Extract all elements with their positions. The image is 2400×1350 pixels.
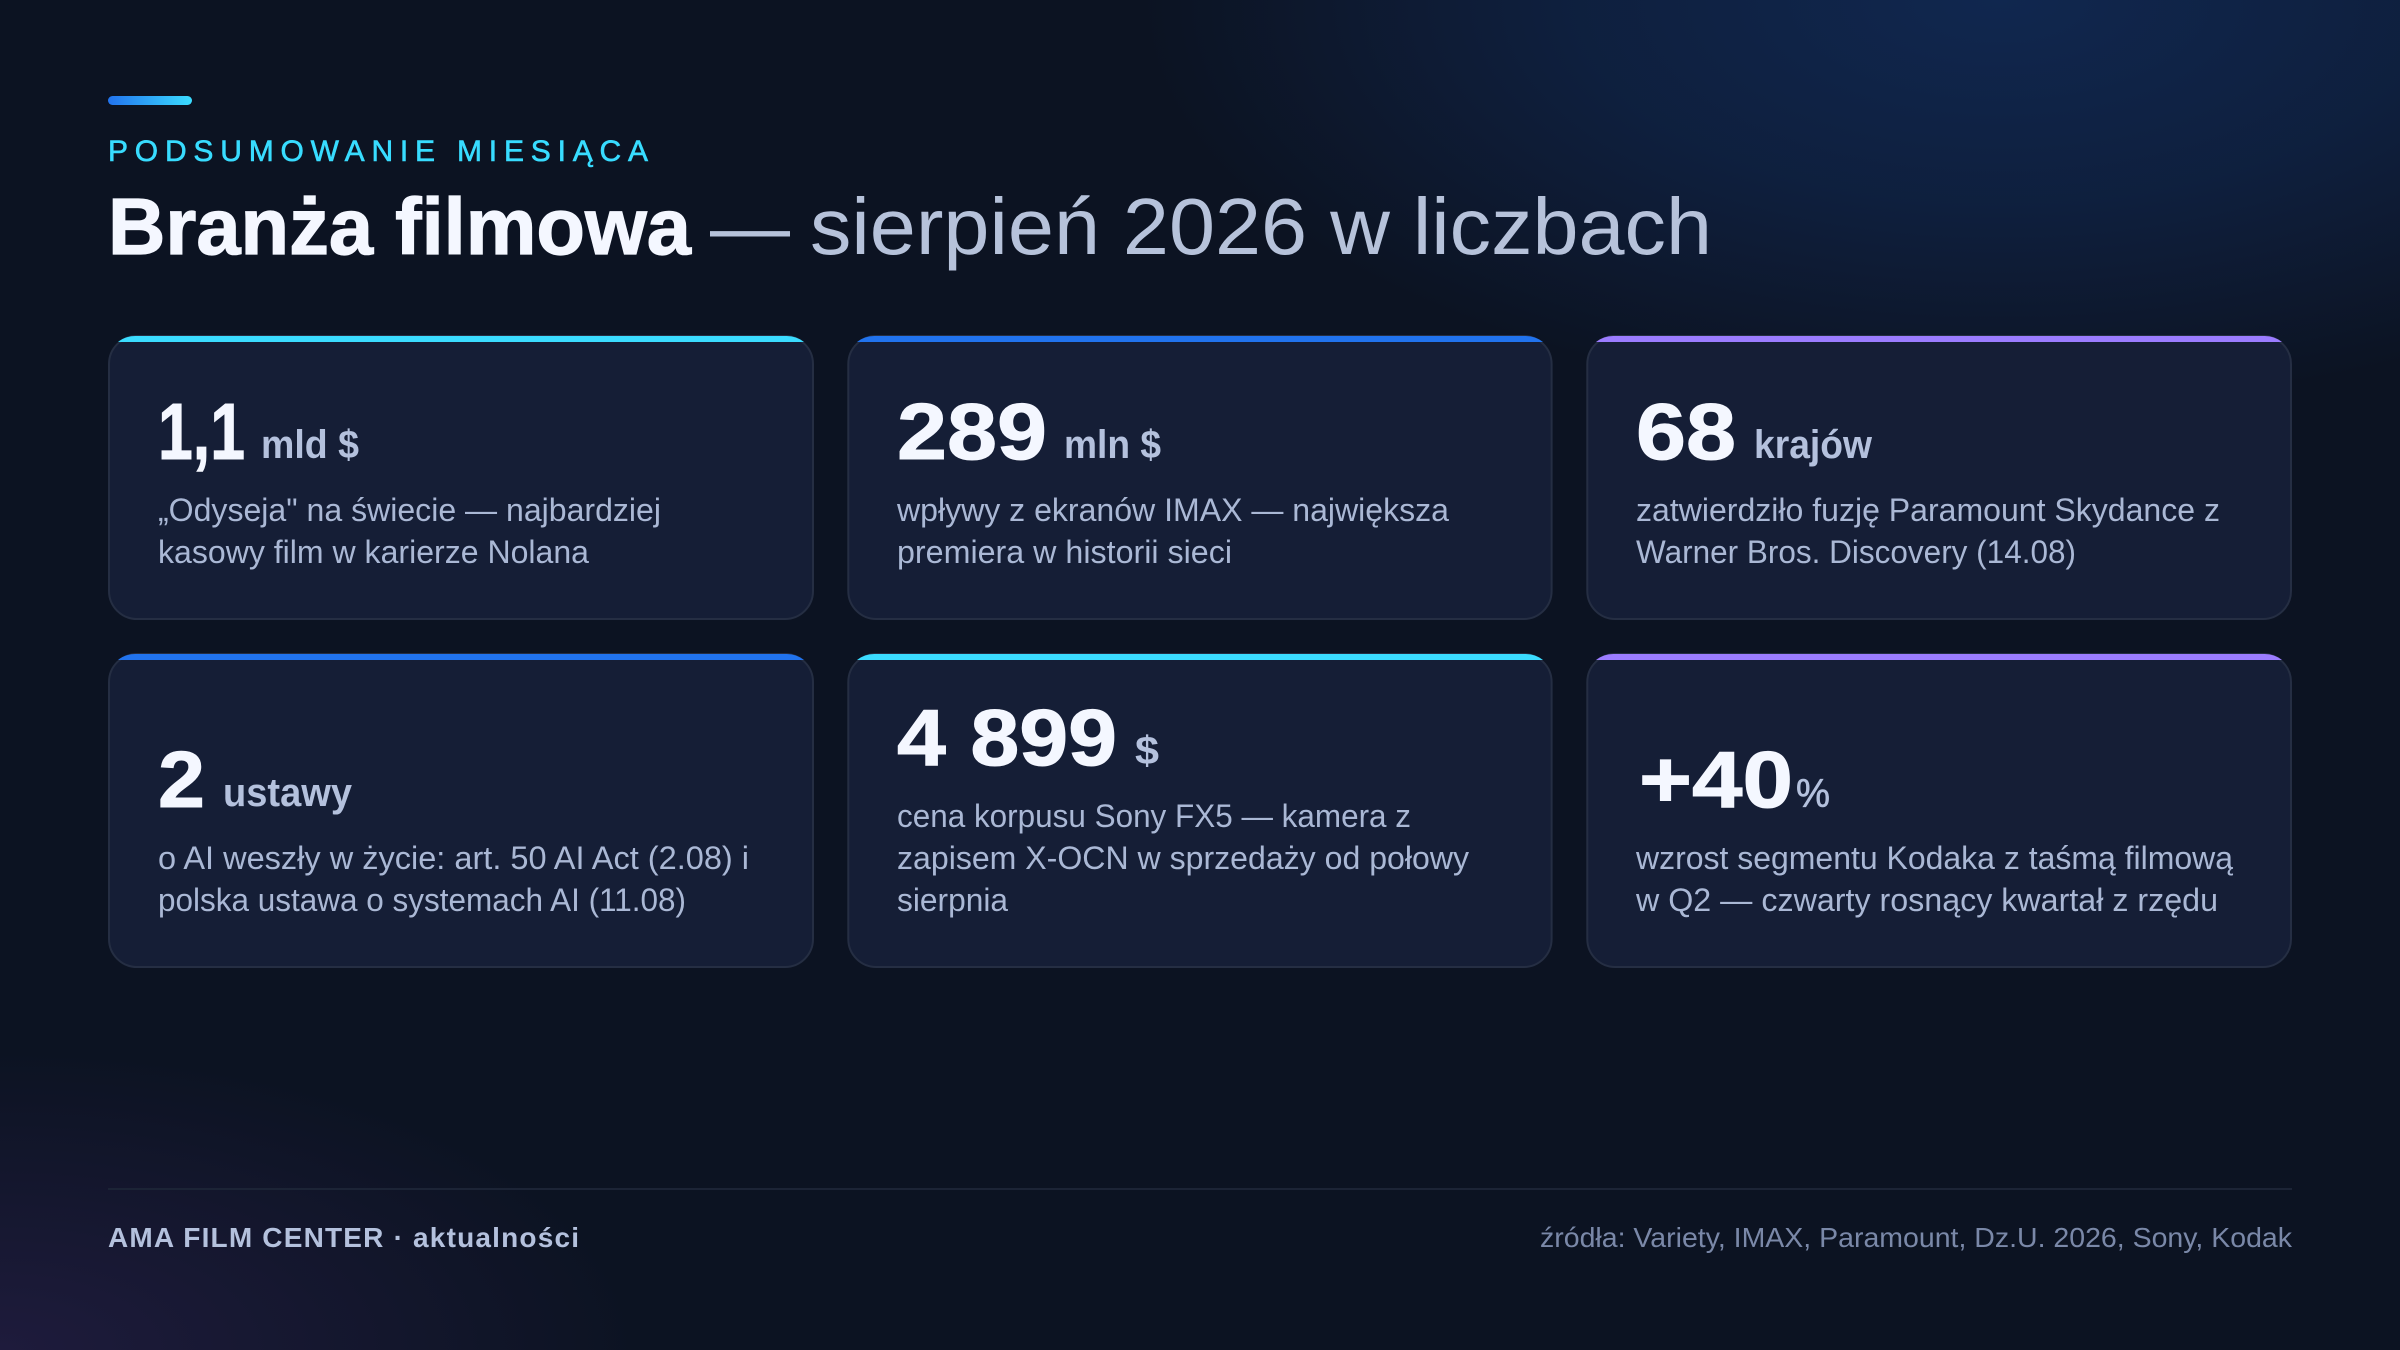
panel: card 68 krajów: zatwierdziło fuzję Paramount Skydance z [1636,492,2220,528]
title: sierpień 2026 w liczbach [810,182,1712,271]
panel: card 1,1 mld $: „Odyseja" na świecie — najbardziej [158,492,661,528]
panel: card 1,1 mld $: 1,1 [158,387,245,476]
panel: card 68 krajów: krajów [1754,423,1873,467]
panel: card 1,1 mld $: kasowy film w karierze Nolana [158,534,589,570]
panel: card 4 899 $: zapisem X-OCN w sprzedaży od połowy [897,840,1469,876]
eyebrow: PODSUMOWANIE MIESIĄCA: PODSUMOWANIE MIESIĄCA [108,135,648,168]
panel: card 289 mln $: premiera w historii sieci [897,534,1232,570]
panel: card +40%: % [1796,772,1830,816]
panel: card +40% [1587,654,2291,967]
panel: card +40%: wzrost segmentu Kodaka z taśmą filmową [1635,840,2233,876]
footer: sources: źródła: Variety, IMAX, Paramount, Dz.U. 2026, Sony, Kodak [1540,1222,2293,1253]
panel: card 4 899 $: 4 899 [897,693,1117,782]
panel: card 289 mln $ [848,336,1552,619]
panel: card 4 899 $ [848,654,1552,967]
title: Branża filmowa [108,182,692,271]
panel: card 2 ustawy: polska ustawa o systemach AI (11.08) [158,882,686,918]
panel: card 289 mln $: mln $ [1064,423,1161,467]
panel: card 68 krajów: Warner Bros. Discovery (14.08) [1636,534,2076,570]
panel: card 2 ustawy: ustawy [223,771,353,815]
panel: card 289 mln $: 289 [897,387,1047,476]
panel: card 68 krajów: 68 [1636,387,1736,476]
panel: card 2 ustawy: 2 [158,735,205,824]
panel: card 4 899 $: $ [1135,729,1159,773]
title [108,182,1712,271]
footer: brand: AMA FILM CENTER · aktualności [108,1222,579,1253]
panel: card 2 ustawy [109,654,813,967]
accent bar [108,96,192,105]
panel: card 4 899 $: sierpnia [897,882,1008,918]
panel: card +40%: +40 [1639,735,1793,824]
panel: card +40%: w Q2 — czwarty rosnący kwartał z rzędu [1635,882,2218,918]
panel: card 1,1 mld $: mld $ [261,423,359,467]
panel: card 68 krajów [1587,336,2291,619]
panel: card 289 mln $: wpływy z ekranów IMAX — największa [896,492,1449,528]
panel: card 2 ustawy: o AI weszły w życie: art. 50 AI Act (2.08) i [158,840,749,876]
panel: card 1,1 mld $ [109,336,813,619]
panel: card 4 899 $: cena korpusu Sony FX5 — kamera z [897,798,1411,834]
title: — [710,182,790,271]
